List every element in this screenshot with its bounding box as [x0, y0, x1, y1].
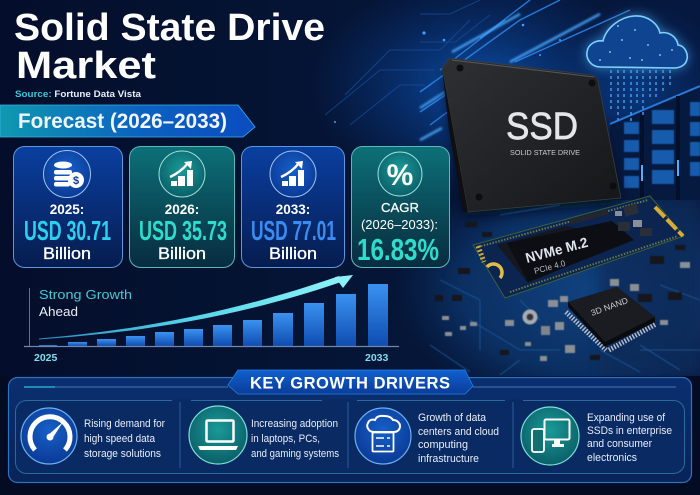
illustration: NVMe M.2 module — [473, 196, 684, 298]
text: computing — [418, 439, 468, 451]
text — [251, 418, 339, 460]
stat card: 2025: Billion — [43, 244, 91, 263]
heading banner — [228, 370, 473, 394]
icon: coins: $ — [73, 175, 79, 187]
illustration: SSD drive — [442, 58, 622, 216]
icon: speedometer — [21, 408, 77, 464]
stat card: 2026 — [130, 146, 234, 268]
stat card: 2025: USD 30.71 — [24, 215, 111, 246]
SSD label: SSD — [506, 106, 578, 148]
icon: cloud server — [355, 408, 411, 464]
text — [418, 412, 499, 465]
text: centers and cloud — [418, 426, 499, 438]
bar chart: strong growth — [24, 275, 399, 364]
text — [84, 418, 165, 460]
text: in laptops, PCs, — [251, 433, 320, 445]
stat card: CAGR — [352, 146, 450, 268]
stat card: CAGR: 16.83% — [357, 232, 439, 267]
illustration: circuit board components — [430, 205, 700, 375]
forecast banner — [0, 105, 255, 137]
stat card: CAGR: CAGR — [381, 200, 419, 215]
heading banner: KEY GROWTH DRIVERS — [250, 374, 450, 392]
icon: growth chart — [270, 151, 316, 197]
text: Expanding use of — [587, 412, 666, 424]
stat card: 2026: 2026: — [165, 202, 199, 217]
driver: laptops and gaming — [189, 406, 339, 464]
icon: growth chart — [159, 151, 205, 197]
stat card: 2033: USD 77.01 — [251, 215, 336, 246]
stat card: 2033: 2033: — [276, 202, 310, 217]
chip label: 3D NAND — [589, 295, 629, 318]
forecast banner: Forecast (2026–2033) — [18, 110, 227, 133]
source: Source: Fortune Data Vista — [15, 89, 142, 99]
text: SSDs in enterprise — [587, 425, 672, 437]
title: Solid State Drive — [14, 7, 325, 49]
text: Rising demand for — [84, 418, 165, 430]
chart heading: Ahead — [39, 304, 78, 319]
stat card: 2033: Billion — [269, 244, 317, 263]
title: Market — [16, 45, 156, 87]
text: electronics — [587, 452, 637, 464]
illustration: 3D NAND chip — [566, 287, 656, 350]
text: Increasing adoption — [251, 418, 338, 430]
arrow: growth trend — [39, 275, 353, 340]
stat card: 2033 — [242, 146, 344, 268]
text: Growth of data — [418, 412, 487, 424]
text: high speed data — [84, 433, 156, 445]
text: and consumer — [587, 438, 652, 450]
PCIe label: PCIe 4.0 — [533, 258, 567, 276]
stat card: CAGR: (2026–2033): — [361, 218, 438, 232]
text: infrastructure — [418, 453, 479, 465]
text: and gaming systems — [251, 448, 339, 460]
panel: key growth drivers — [8, 370, 692, 482]
driver: enterprise and consumer electronics — [521, 407, 672, 465]
icon: percent: % — [387, 159, 413, 192]
chart heading — [39, 287, 132, 319]
stat card: 2026: Billion — [158, 244, 206, 263]
text — [587, 412, 672, 464]
title — [14, 7, 325, 87]
stat card: 2025: 2025: — [50, 202, 84, 217]
illustration: server racks — [610, 86, 700, 200]
driver: high speed storage — [21, 408, 165, 464]
driver: data centers and cloud — [355, 408, 499, 465]
text: storage solutions — [84, 448, 161, 460]
stat card: 2025 — [14, 146, 122, 268]
icon: monitor and phone — [521, 407, 579, 465]
bars — [39, 284, 388, 346]
illustration: glowing data cloud — [587, 16, 687, 122]
icon: laptop — [189, 406, 247, 464]
chart heading: Strong Growth — [39, 287, 132, 302]
stat card: 2026: USD 35.73 — [139, 215, 227, 246]
axis labels: 2025 — [34, 352, 58, 364]
NVMe label: NVMe M.2 — [524, 234, 590, 266]
bar chart: strong growth: 2033 — [365, 352, 389, 364]
SSD sublabel: SOLID STATE DRIVE — [510, 148, 580, 157]
